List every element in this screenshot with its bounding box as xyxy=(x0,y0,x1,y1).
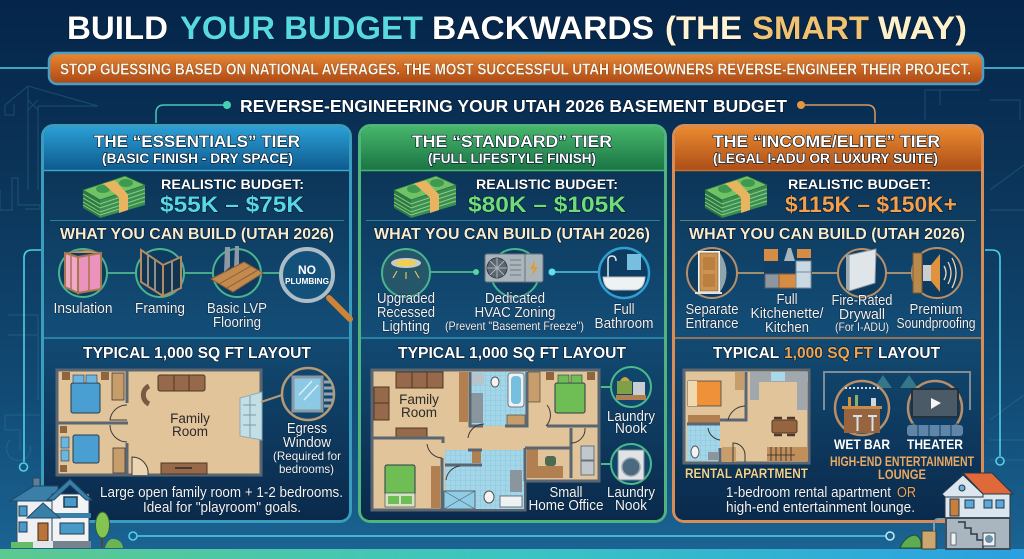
header: (LEGAL I-ADU OR LUXURY SUITE) xyxy=(713,151,938,166)
label: egress window: Window xyxy=(283,435,331,451)
panel frame standard xyxy=(360,126,666,522)
title: YOUR BUDGET xyxy=(180,10,423,46)
budget: $80K – $105K xyxy=(468,192,627,217)
lower body xyxy=(44,338,349,520)
label: home office: Home Office xyxy=(528,498,604,514)
panel frame elite xyxy=(674,126,982,522)
budget xyxy=(160,177,305,217)
description: essentials: Ideal for "playroom" goals. xyxy=(143,499,301,516)
panel: income elite tier xyxy=(674,126,982,522)
floor plan: essentials xyxy=(57,370,262,475)
label: full bathroom: Bathroom xyxy=(594,316,654,332)
title: WAY) xyxy=(878,10,967,46)
label: home office: Small xyxy=(550,485,582,501)
label: high-end entertainment lounge: LOUNGE xyxy=(878,467,926,482)
banner xyxy=(49,53,983,84)
icon: cash stack xyxy=(394,176,456,218)
connector xyxy=(737,272,912,274)
layout heading: TYPICAL 1,000 SQ FT LAYOUT xyxy=(398,345,627,362)
label: premium soundproofing: Soundproofing xyxy=(896,316,976,332)
icon: full bathroom xyxy=(599,248,649,298)
lower body xyxy=(675,338,981,520)
icon: no plumbing magnifier: NO xyxy=(298,263,316,277)
description: elite: 1-bedroom rental apartment xyxy=(726,484,892,501)
label: rental apartment: RENTAL APARTMENT xyxy=(685,465,808,481)
label: HVAC: Dedicated xyxy=(485,291,545,307)
connector right xyxy=(552,271,600,273)
label: laundry nook washer xyxy=(607,485,656,514)
label: laundry nook top xyxy=(607,409,656,437)
panel: essentials tier: Insulation xyxy=(54,301,112,317)
lounge frame xyxy=(824,372,970,410)
label: high-end entertainment lounge: HIGH-END ENTERTAINMENT xyxy=(830,454,975,469)
label: kitchen: Full xyxy=(776,292,798,308)
label: fire-rated drywall xyxy=(832,293,892,334)
icon: framing xyxy=(136,249,184,297)
icon: house right with basement xyxy=(900,473,1013,549)
label: separate entrance: Separate xyxy=(686,302,738,318)
icon: no plumbing magnifier xyxy=(281,249,350,319)
label: premium soundproofing xyxy=(896,302,976,332)
label: egress window: bedrooms) xyxy=(279,462,334,476)
icon: wet bar xyxy=(835,381,889,435)
lower body xyxy=(361,338,664,520)
header xyxy=(675,127,981,170)
section heading with connectors xyxy=(156,96,875,123)
icon: house left xyxy=(10,478,123,548)
layout heading: 1,000 SQ FT xyxy=(784,345,874,362)
icon: insulation xyxy=(59,249,107,297)
connector xyxy=(107,272,280,274)
callout: laundry nook top xyxy=(601,367,651,407)
label: recessed lighting xyxy=(377,291,435,335)
layout heading: TYPICAL 1,000 SQ FT LAYOUT xyxy=(83,345,312,362)
label: fire-rated drywall: Drywall xyxy=(839,307,885,323)
label: recessed lighting: Upgraded xyxy=(377,291,435,307)
description: essentials xyxy=(100,484,343,516)
floor plan: standard: Room xyxy=(401,405,437,420)
floor plan: essentials: Room xyxy=(172,424,208,439)
label: full bathroom xyxy=(594,302,654,332)
description: essentials: Large open family room + 1-2 bedrooms. xyxy=(100,484,343,501)
label: basic LVP flooring: Basic LVP xyxy=(207,301,267,317)
connector node green xyxy=(473,269,479,275)
title: (THE xyxy=(665,10,742,46)
icon: kitchen xyxy=(764,248,811,288)
budget: $55K – $75K xyxy=(160,192,305,217)
budget: $115K – $150K+ xyxy=(785,192,957,217)
label: HVAC: HVAC Zoning xyxy=(474,305,556,321)
budget: REALISTIC BUDGET: xyxy=(476,177,618,192)
floor plan: essentials: Family xyxy=(170,411,210,426)
label: kitchen: Kitchen xyxy=(765,320,809,336)
label: full bathroom: Full xyxy=(614,302,634,318)
header: (FULL LIFESTYLE FINISH) xyxy=(428,151,596,166)
description: elite: OR xyxy=(897,484,916,501)
icon: no plumbing magnifier: PLUMBING xyxy=(285,276,329,286)
icon: theater xyxy=(907,381,963,436)
upper body xyxy=(675,171,981,338)
label: kitchen xyxy=(750,292,824,336)
callout: laundry nook washer xyxy=(601,444,651,484)
callout: egress window xyxy=(261,368,334,420)
icon: separate entrance xyxy=(687,248,737,298)
upper body xyxy=(44,171,349,338)
label: theater: THEATER xyxy=(907,436,963,452)
budget: REALISTIC BUDGET: xyxy=(161,177,304,192)
label: kitchen: Kitchenette/ xyxy=(750,306,824,322)
header xyxy=(361,127,664,170)
label: separate entrance: Entrance xyxy=(686,316,738,332)
connector node blue xyxy=(548,268,556,276)
label: high-end entertainment lounge xyxy=(830,454,975,482)
label: egress window: Egress xyxy=(287,421,327,437)
label: laundry nook washer: Nook xyxy=(615,498,648,514)
label: HVAC xyxy=(445,291,584,333)
icon: cash stack xyxy=(705,176,767,218)
label: egress window: (Required for xyxy=(273,449,341,463)
what you can build heading: WHAT YOU CAN BUILD (UTAH 2026) xyxy=(60,226,334,243)
layout heading: TYPICAL xyxy=(713,345,779,362)
layout heading: LAYOUT xyxy=(878,345,941,362)
floor plan: rental apartment xyxy=(684,370,809,463)
floor plan: standard xyxy=(371,370,599,511)
budget: REALISTIC BUDGET: xyxy=(788,177,931,192)
what you can build heading: WHAT YOU CAN BUILD (UTAH 2026) xyxy=(689,226,965,243)
icon: recessed lighting xyxy=(382,249,430,297)
label: premium soundproofing: Premium xyxy=(910,302,962,318)
label: egress window xyxy=(273,421,341,476)
header: THE “INCOME/ELITE” TIER xyxy=(713,132,940,151)
icon: HVAC unit xyxy=(485,249,543,297)
icon: premium soundproofing xyxy=(912,248,962,298)
budget xyxy=(468,177,627,217)
label: HVAC: (Prevent "Basement Freeze") xyxy=(445,319,584,333)
title: BUILD xyxy=(67,10,168,46)
icon: cash stack xyxy=(83,176,145,218)
budget xyxy=(785,177,957,217)
panel frame essentials xyxy=(42,126,350,522)
label: wet bar: WET BAR xyxy=(834,436,890,452)
title: SMART xyxy=(752,10,869,46)
label: fire-rated drywall: (For I-ADU) xyxy=(835,320,889,334)
label: home office xyxy=(528,485,604,514)
icon: basic LVP flooring xyxy=(211,246,263,297)
label: basic LVP flooring xyxy=(207,301,267,331)
label: laundry nook top: Nook xyxy=(615,421,648,437)
description: elite: high-end entertainment lounge. xyxy=(726,499,915,516)
label: laundry nook washer: Laundry xyxy=(607,485,656,501)
what you can build heading: WHAT YOU CAN BUILD (UTAH 2026) xyxy=(374,226,650,243)
floor plan: standard: Family xyxy=(399,392,439,407)
header: THE “STANDARD” TIER xyxy=(412,132,612,151)
label: laundry nook top: Laundry xyxy=(607,409,656,425)
header: THE “ESSENTIALS” TIER xyxy=(94,132,300,151)
icon: fire-rated drywall xyxy=(838,249,886,297)
description: elite xyxy=(726,484,916,516)
label: recessed lighting: Recessed xyxy=(377,305,435,321)
connector xyxy=(430,271,476,273)
header xyxy=(44,127,349,170)
label: fire-rated drywall: Fire-Rated xyxy=(832,293,892,309)
label: recessed lighting: Lighting xyxy=(382,319,430,335)
panel: essentials tier: Framing xyxy=(135,301,185,317)
panel: essentials tier xyxy=(42,126,350,522)
section heading with connectors: REVERSE-ENGINEERING YOUR UTAH 2026 BASEMENT BUDGET xyxy=(240,96,787,116)
title: BACKWARDS xyxy=(432,10,654,46)
layout heading xyxy=(675,338,981,362)
panel: standard tier xyxy=(360,126,666,522)
label: basic LVP flooring: Flooring xyxy=(213,315,261,331)
upper body xyxy=(361,171,664,338)
header: (BASIC FINISH - DRY SPACE) xyxy=(102,151,293,166)
label: separate entrance xyxy=(686,302,738,332)
